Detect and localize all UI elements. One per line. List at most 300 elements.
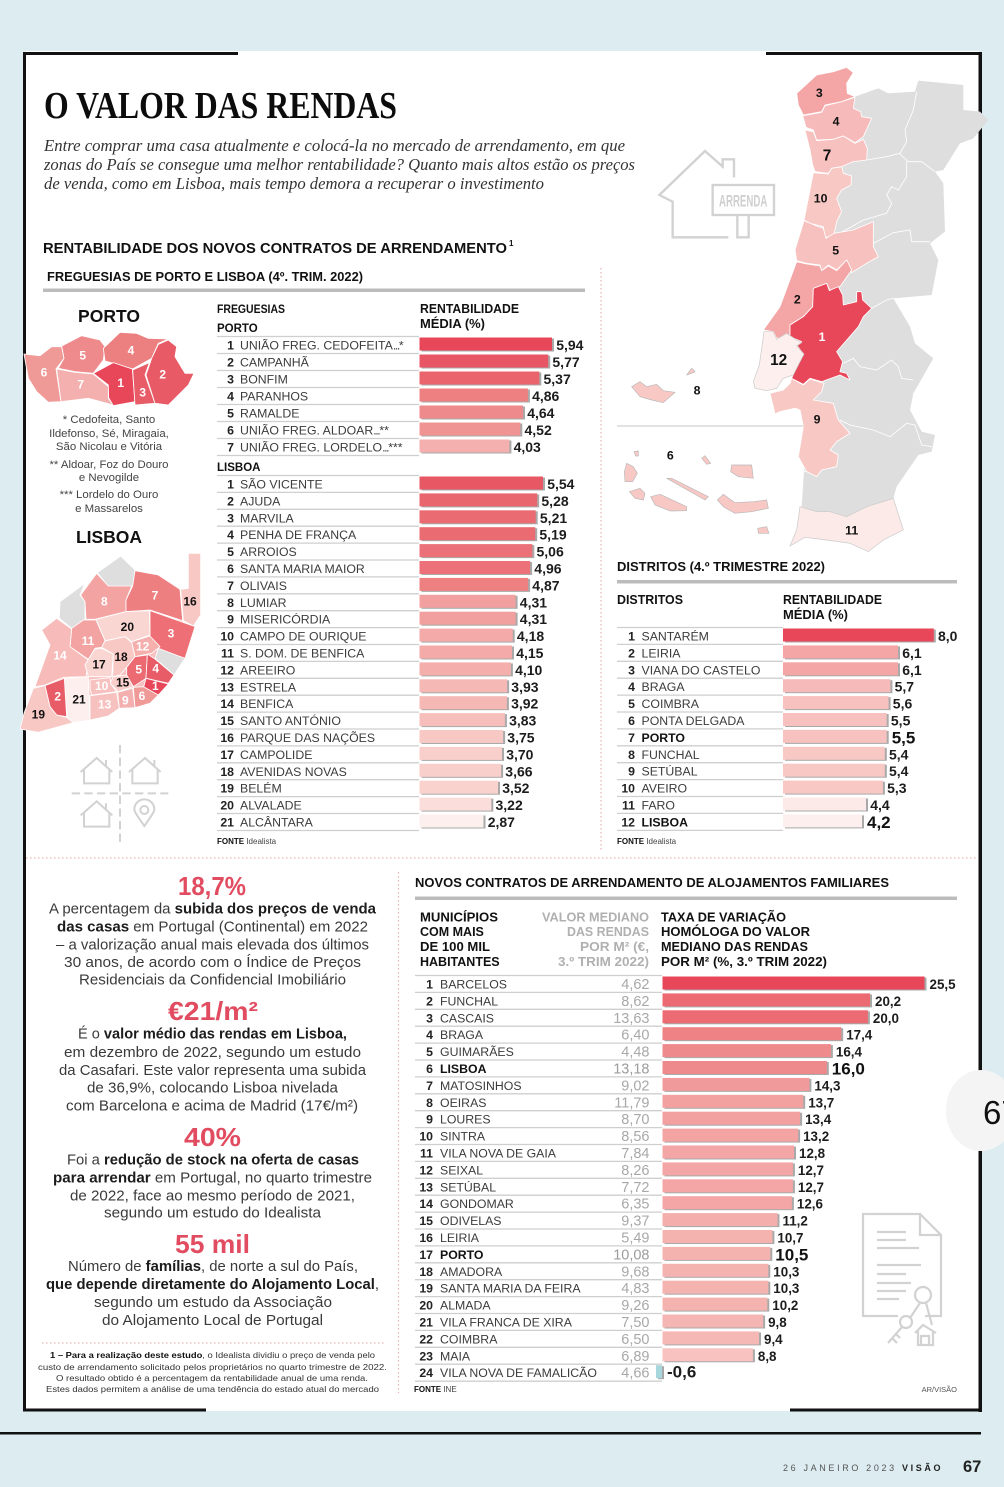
- table: freguesias header: RENTABILIDADE: [420, 302, 519, 316]
- column: municípios: COM MAIS: [420, 925, 484, 939]
- row: Penha de França: 5,19: [539, 527, 567, 543]
- row: Alvalade: ALVALADE: [240, 799, 302, 813]
- map: Porto freguesias: 6: [41, 366, 48, 380]
- row: Olivais: [217, 577, 560, 593]
- row: Leiria: 2: [628, 646, 635, 660]
- stat: €21/m²: em dezembro de 2022, segundo um estudo: [64, 1044, 361, 1061]
- row: Estrela: 13: [220, 680, 234, 694]
- row: Funchal: FUNCHAL: [440, 994, 498, 1008]
- sub-heading: freguesias: FREGUESIAS DE PORTO E LISBOA (4º. TRIM. 2022): [47, 269, 363, 284]
- Porto heading: PORTO: [78, 306, 140, 326]
- row: Estrela: [217, 678, 539, 695]
- stat: €21/m²: É o valor médio das rendas em Lisboa,: [78, 1026, 347, 1042]
- row: Sintra: [415, 1128, 829, 1145]
- stat: €21/m²: com Barcelona e acima de Madrid (17€/m²): [66, 1098, 358, 1114]
- row: Seixal: 12: [419, 1163, 433, 1177]
- map: district numbers: 8: [694, 384, 701, 398]
- row: Viana do Castelo: VIANA DO CASTELO: [642, 663, 760, 677]
- row: São Vicente: 1: [227, 478, 234, 492]
- Porto footnotes: e Nevogilde: [79, 472, 139, 484]
- column: taxa de variação: HOMÓLOGA DO VALOR: [661, 924, 810, 939]
- row: Odivelas: 11,2: [782, 1214, 808, 1229]
- stat: €21/m²: [59, 996, 367, 1114]
- row: Santarém: SANTARÉM: [642, 628, 709, 644]
- row: Belém: BELÉM: [240, 781, 282, 796]
- source: distritos: FONTE Idealista: [617, 837, 677, 846]
- row: Cascais: 13,63: [613, 1011, 650, 1027]
- row: Maia: 6,89: [621, 1349, 650, 1365]
- stat: 18,7%: 18,7%: [178, 871, 246, 901]
- footnote marker: 1: [509, 239, 514, 248]
- row: Leiria: 16: [419, 1231, 433, 1245]
- map: Porto freguesias: 5: [79, 348, 86, 362]
- footer: date and magazine: 26 JANEIRO 2023 VISÃO: [783, 1463, 943, 1473]
- map: district numbers: 5: [832, 243, 839, 257]
- row: Vila Franca de Xira: 9,8: [768, 1315, 787, 1330]
- row: Lordelo: UNIÃO FREG. LORDELO...***: [240, 440, 403, 454]
- map: district numbers: 9: [814, 413, 821, 427]
- row: Guimarães: 4,48: [621, 1045, 650, 1061]
- row: Odivelas: ODIVELAS: [440, 1214, 502, 1228]
- row: Marvila: 3: [227, 511, 234, 525]
- row: Alvalade: [217, 797, 523, 813]
- row: Santo António: 15: [220, 714, 234, 728]
- row: Loures: [415, 1111, 832, 1128]
- row: Funchal: 8,62: [621, 994, 650, 1010]
- row: Benfica: BENFICA: [240, 697, 294, 711]
- row: Parque das Nações: 16: [220, 731, 234, 745]
- column: municípios: [420, 910, 500, 969]
- row: Paranhos: [217, 388, 560, 404]
- row: Avenidas Novas: [217, 763, 533, 779]
- row: Campo de Ourique: 10: [220, 630, 234, 644]
- map: Lisboa freguesias: 7: [152, 588, 159, 602]
- row: Santo António: 3,83: [509, 713, 537, 729]
- row: Campolide: 3,70: [506, 746, 534, 762]
- map: Lisboa freguesias: 2: [54, 689, 61, 703]
- row: Lisboa: 12: [621, 815, 635, 829]
- row: Santa Maria da Feira: SANTA MARIA DA FEIRA: [440, 1282, 581, 1296]
- row: Lisboa: [415, 1060, 865, 1078]
- heading: novos contratos: NOVOS CONTRATOS DE ARRENDAMENTO DE ALOJAMENTOS FAMILIARES: [415, 875, 889, 890]
- row: Gondomar: [415, 1195, 823, 1213]
- map: Lisboa freguesias: 5: [135, 662, 142, 676]
- table: distritos: [617, 628, 958, 832]
- row: Ramalde: [217, 404, 555, 421]
- Lisboa label: LISBOA: [217, 462, 260, 474]
- row: Santa Maria Maior: SANTA MARIA MAIOR: [240, 562, 365, 576]
- row: Santo António: [217, 712, 537, 729]
- row: Olivais: OLIVAIS: [240, 579, 287, 593]
- row: Leiria: 6,1: [902, 645, 922, 661]
- row: São Vicente: SÃO VICENTE: [240, 478, 323, 492]
- stat: 18,7%: – a valorização anual mais elevada dos últimos: [56, 936, 369, 954]
- footer: page number: 67: [963, 1458, 981, 1476]
- row: Setúbal: SETÚBAL: [440, 1179, 496, 1194]
- row: São Vicente: [217, 476, 575, 492]
- column: municípios: MUNICÍPIOS: [420, 910, 498, 924]
- row: Leiria: [617, 644, 922, 661]
- row: Guimarães: GUIMARÃES: [440, 1045, 514, 1059]
- intro text: zonas do País se consegue uma melhor rentabilidade? Quanto mais altos estão os preços: [43, 155, 635, 174]
- row: Setúbal: 5,4: [889, 763, 909, 779]
- row: Ramalde: 5: [227, 406, 234, 420]
- row: Ponta Delgada: 6: [628, 714, 635, 728]
- stat: 55 mil: [46, 1229, 379, 1329]
- row: Alvalade: 20: [220, 799, 234, 813]
- table: freguesias header: [217, 302, 519, 331]
- row: Coimbra: [617, 695, 912, 712]
- row: Setúbal: 7,72: [621, 1180, 650, 1196]
- table: distritos header: RENTABILIDADE: [783, 593, 882, 607]
- row: Lisboa: 6: [426, 1062, 433, 1076]
- row: Arroios: 5,06: [536, 544, 564, 560]
- source: freguesias: FONTE Idealista: [217, 837, 277, 846]
- row: Matosinhos: 14,3: [814, 1078, 840, 1093]
- map: Lisboa freguesias: 14: [53, 648, 67, 662]
- map: Braga: [803, 97, 872, 143]
- row: Vila Nova de Famalicão: -0,6: [667, 1363, 696, 1382]
- footnote: O resultado obtido é a percentagem da rentabilidade anual de uma renda.: [56, 1373, 368, 1383]
- intro text: [43, 136, 635, 193]
- column: taxa de variação: [661, 910, 827, 969]
- row: Ajuda: AJUDA: [240, 494, 281, 508]
- row: Gondomar: GONDOMAR: [440, 1197, 514, 1211]
- row: Bonfim: 3: [227, 372, 234, 386]
- row: Almada: 10,2: [772, 1298, 798, 1313]
- stat: 40%: [53, 1122, 372, 1222]
- map: district numbers: 1: [819, 330, 826, 344]
- row: Campanhã: CAMPANHÃ: [240, 356, 310, 370]
- row: Arroios: ARROIOS: [240, 545, 297, 559]
- row: Porto: 5,5: [892, 728, 915, 747]
- map: Porto freguesias: 2: [159, 367, 166, 381]
- row: Penha de França: [217, 526, 567, 543]
- row: Amadora: 18: [419, 1265, 433, 1279]
- row: Ajuda: [217, 492, 569, 509]
- row: Aldoar: 4,52: [524, 422, 552, 438]
- row: Vila Nova de Gaia: 7,84: [621, 1146, 650, 1162]
- row: Santa Maria Maior: 4,96: [534, 560, 562, 576]
- row: Braga: BRAGA: [642, 680, 685, 694]
- row: Seixal: SEIXAL: [440, 1163, 483, 1177]
- icon: contract document with keys: [863, 1214, 941, 1345]
- table: freguesias header: FREGUESIAS: [217, 302, 285, 316]
- row: Vila Nova de Gaia: VILA NOVA DE GAIA: [440, 1146, 557, 1160]
- stat: 55 mil: do Alojamento Local de Portugal: [102, 1312, 323, 1329]
- Lisboa heading: LISBOA: [76, 527, 142, 547]
- row: Gondomar: 6,35: [621, 1197, 650, 1213]
- stat: 40%: segundo um estudo do Idealista: [104, 1204, 322, 1222]
- row: Oeiras: 11,79: [614, 1095, 650, 1111]
- row: Setúbal: 9: [628, 765, 635, 779]
- row: Leiria: LEIRIA: [440, 1231, 480, 1245]
- row: Lisboa: LISBOA: [440, 1062, 487, 1076]
- stat: 40%: 40%: [184, 1122, 241, 1152]
- stat: 40%: de 2022, face ao mesmo período de 2021,: [70, 1188, 355, 1204]
- stat: 55 mil: segundo um estudo da Associação: [94, 1294, 332, 1311]
- key figures column: [46, 871, 379, 1329]
- row: Setúbal: 13: [419, 1180, 433, 1194]
- row: Ajuda: 2: [227, 494, 234, 508]
- row: Cedofeita: UNIÃO FREG. CEDOFEITA...*: [240, 338, 404, 352]
- row: Matosinhos: [415, 1077, 840, 1094]
- stat: 55 mil: Número de famílias, de norte a sul do País,: [68, 1258, 358, 1275]
- column: municípios: DE 100 MIL: [420, 940, 490, 954]
- row: Amadora: [415, 1263, 799, 1280]
- row: Leiria: 5,49: [621, 1230, 650, 1246]
- Porto footnotes: * Cedofeita, Santo: [63, 414, 155, 426]
- row: Cedofeita: 5,94: [556, 337, 584, 353]
- row: Penha de França: 4: [227, 528, 234, 542]
- row: Amadora: 10,3: [773, 1264, 799, 1279]
- title: O VALOR DAS RENDAS: [44, 85, 397, 127]
- row: Sintra: 13,2: [803, 1129, 829, 1144]
- map: Madeira islands: [632, 368, 695, 403]
- row: S. Dom. de Benfica: [217, 644, 544, 661]
- row: Coimbra: 5: [628, 697, 635, 711]
- row: Arroios: 5: [227, 545, 234, 559]
- row: Barcelos: BARCELOS: [440, 978, 507, 992]
- row: Alcântara: 2,87: [488, 814, 515, 830]
- row: Setúbal: [415, 1178, 824, 1196]
- row: Oeiras: 8: [426, 1096, 433, 1110]
- row: Coimbra: 6,50: [621, 1332, 650, 1348]
- row: Barcelos: 25,5: [930, 977, 956, 992]
- map: Setúbal: [770, 378, 850, 477]
- row: Coimbra: 22: [419, 1332, 433, 1346]
- row: Braga: 5,7: [895, 679, 914, 695]
- row: Faro: 11: [622, 798, 635, 812]
- row: Bonfim: [217, 370, 571, 387]
- row: Campo de Ourique: 4,18: [517, 628, 544, 644]
- row: Parque das Nações: PARQUE DAS NAÇÕES: [240, 730, 375, 745]
- Porto footnotes: São Nicolau e Vitória: [56, 441, 163, 453]
- row: Vila Franca de Xira: 7,50: [621, 1315, 650, 1331]
- row: Aveiro: AVEIRO: [642, 782, 687, 796]
- row: Paranhos: PARANHOS: [240, 390, 308, 404]
- table: Porto freguesias: [217, 323, 584, 456]
- row: Olivais: 4,87: [532, 577, 560, 593]
- row: Areeiro: 4,10: [515, 662, 543, 678]
- row: Vila Nova de Famalicão: [415, 1363, 696, 1382]
- row: Bonfim: BONFIM: [240, 372, 288, 386]
- row: Benfica: [217, 695, 539, 712]
- row: Vila Nova de Gaia: [415, 1144, 826, 1162]
- row: Barcelos: 1: [426, 978, 433, 992]
- stat: 40%: para arrendar em Portugal, no quarto trimestre: [53, 1170, 372, 1186]
- stat: €21/m²: €21/m²: [168, 996, 258, 1026]
- map: Lisboa freguesias: 10: [95, 679, 109, 693]
- row: Porto: 17: [419, 1248, 433, 1262]
- column: valor mediano: [542, 910, 649, 969]
- map: Lisboa freguesias: 9: [122, 693, 129, 707]
- Porto footnotes: Ildefonso, Sé, Miragaia,: [49, 428, 169, 440]
- row: Marvila: [217, 509, 567, 526]
- row: Aveiro: 5,3: [887, 780, 907, 796]
- map: Lisboa freguesias: 8: [101, 594, 108, 608]
- row: São Vicente: 5,54: [547, 476, 575, 492]
- row: Lumiar: 8: [227, 596, 234, 610]
- row: Vila Nova de Gaia: 11: [420, 1146, 433, 1160]
- stat: 55 mil: 55 mil: [175, 1229, 250, 1259]
- row: Aldoar: 6: [227, 424, 234, 438]
- stat: 18,7%: [49, 871, 377, 988]
- row: Vila Franca de Xira: 21: [419, 1316, 433, 1330]
- row: Viana do Castelo: [617, 661, 922, 678]
- row: Avenidas Novas: 18: [220, 765, 234, 779]
- row: Porto: 7: [628, 731, 635, 745]
- row: Parque das Nações: 3,75: [507, 730, 535, 746]
- row: Faro: [617, 796, 890, 813]
- row: Funchal: 8: [628, 748, 635, 762]
- map: Lisboa freguesias: 13: [98, 697, 112, 711]
- row: Campo de Ourique: CAMPO DE OURIQUE: [240, 630, 366, 644]
- row: Almada: 20: [419, 1299, 433, 1313]
- row: Matosinhos: 9,02: [621, 1078, 650, 1094]
- row: Campolide: 17: [220, 748, 234, 762]
- row: Funchal: FUNCHAL: [642, 748, 700, 762]
- dotted separators: [26, 268, 976, 1393]
- row: Setúbal: SETÚBAL: [642, 764, 698, 779]
- row: Santa Maria da Feira: 19: [419, 1282, 433, 1296]
- map: Viana do Castelo: [797, 67, 855, 115]
- row: Cedofeita: [217, 336, 584, 353]
- table: distritos header: [617, 593, 882, 622]
- row: Maia: [415, 1347, 777, 1365]
- row: Matosinhos: MATOSINHOS: [440, 1079, 522, 1093]
- row: Benfica: 14: [220, 697, 234, 711]
- row: Campolide: CAMPOLIDE: [240, 748, 312, 762]
- row: Santarém: [617, 628, 958, 644]
- row: Sintra: SINTRA: [440, 1130, 486, 1144]
- row: Braga: [617, 678, 914, 695]
- row: Braga: 4: [426, 1028, 433, 1042]
- map: Lisboa freguesias: 6: [139, 689, 146, 703]
- row: Coimbra: COIMBRA: [642, 697, 700, 711]
- row: Santo António: SANTO ANTÓNIO: [240, 713, 341, 728]
- stat: 40%: Foi a redução de stock na oferta de casas: [67, 1152, 359, 1168]
- row: Santarém: 8,0: [938, 628, 958, 644]
- row: Funchal: 20,2: [875, 994, 901, 1009]
- row: Funchal: [415, 992, 901, 1010]
- row: Alvalade: 3,22: [495, 797, 523, 813]
- stat: 18,7%: 30 anos, de acordo com o Índice de Preços: [64, 954, 361, 971]
- row: Estrela: 3,93: [511, 679, 539, 695]
- table: Lisboa freguesias: [217, 462, 575, 830]
- row: Cascais: 3: [426, 1011, 433, 1025]
- page-tab circle: [946, 1070, 1004, 1151]
- map: Lisboa freguesias: 21: [72, 693, 86, 707]
- intro text: de venda, como em Lisboa, mais tempo demora a recuperar o investimento: [44, 174, 544, 193]
- map: Lisboa freguesias: [20, 527, 201, 732]
- row: Cedofeita: 1: [227, 338, 234, 352]
- row: Santa Maria Maior: [217, 560, 562, 576]
- map: district numbers: [667, 86, 858, 538]
- row: Loures: 9: [426, 1113, 433, 1127]
- row: Misericórdia: [217, 611, 547, 627]
- row: Alcântara: ALCÂNTARA: [240, 814, 314, 830]
- table: distritos header: MÉDIA (%): [783, 607, 848, 622]
- row: S. Dom. de Benfica: 4,15: [516, 645, 544, 661]
- map: district numbers: 6: [667, 449, 674, 463]
- Porto footnotes: [49, 414, 169, 515]
- row: Lisboa: 16,0: [832, 1060, 865, 1078]
- row: Santa Maria Maior: 6: [227, 562, 234, 576]
- icon: houses and location pin: [72, 745, 168, 843]
- row: Areeiro: [217, 661, 543, 678]
- row: Santa Maria da Feira: 10,3: [773, 1281, 799, 1296]
- map: Azores islands: [624, 451, 769, 533]
- icon: house with ARRENDA sign: ARRENDA: [719, 192, 767, 211]
- row: Seixal: [415, 1161, 824, 1179]
- row: Marvila: 5,21: [540, 510, 567, 526]
- row: Estrela: ESTRELA: [240, 680, 297, 694]
- row: Aveiro: [617, 780, 907, 796]
- row: Cascais: 20,0: [873, 1011, 899, 1026]
- map: district numbers: 10: [814, 192, 828, 206]
- row: Loures: 13,4: [805, 1112, 832, 1127]
- row: Ajuda: 5,28: [541, 493, 569, 509]
- row: Leiria: 10,7: [777, 1230, 803, 1246]
- row: Olivais: 7: [227, 579, 234, 593]
- table: municípios: [415, 976, 956, 1382]
- row: Barcelos: [415, 976, 956, 993]
- row: Porto: PORTO: [642, 731, 685, 745]
- row: Cascais: CASCAIS: [440, 1011, 494, 1025]
- row: Aldoar: [217, 422, 552, 438]
- map: Lisboa freguesias: 20: [121, 620, 134, 634]
- column: taxa de variação: MEDIANO DAS RENDAS: [661, 940, 808, 954]
- footnote: [38, 1350, 387, 1394]
- map: Lisboa freguesias: 12: [136, 639, 150, 653]
- map: district numbers: 4: [833, 115, 840, 129]
- row: Braga: 6,40: [621, 1028, 650, 1044]
- column: valor mediano: VALOR MEDIANO: [542, 910, 649, 924]
- row: Bonfim: 5,37: [543, 371, 571, 387]
- footnote: Estes dados permitem a análise de uma tendência do estado atual do mercado: [46, 1384, 379, 1394]
- row: Arroios: [217, 543, 564, 560]
- row: Odivelas: 9,37: [621, 1214, 650, 1230]
- map: Faro: [790, 498, 903, 552]
- intro text: Entre comprar uma casa atualmente e colocá-la no mercado de arrendamento, em que: [43, 136, 625, 155]
- row: Ponta Delgada: 5,5: [891, 712, 911, 728]
- row: Porto: [617, 728, 915, 747]
- row: Lisboa: LISBOA: [642, 815, 688, 829]
- row: Avenidas Novas: 3,66: [505, 763, 533, 779]
- row: Lumiar: [217, 594, 547, 610]
- table: freguesias header: MÉDIA (%): [420, 316, 485, 331]
- map: Aveiro: [804, 167, 852, 238]
- row: Areeiro: 12: [220, 663, 234, 677]
- map: Porto district: [805, 130, 867, 173]
- table: distritos header: DISTRITOS: [617, 593, 683, 607]
- footnote: 1 – Para a realização deste estudo , o Idealista dividiu o preço de venda pelo: [50, 1350, 375, 1360]
- map: district numbers: 12: [770, 352, 787, 369]
- stat: €21/m²: da Casafari. Este valor representa uma subida: [59, 1062, 367, 1079]
- row: Vila Nova de Famalicão: 24: [419, 1366, 433, 1380]
- map: Portugal districts: [617, 67, 988, 552]
- row: Almada: [415, 1297, 798, 1314]
- map: district numbers: 7: [823, 148, 831, 165]
- row: Odivelas: [415, 1212, 808, 1230]
- map: Santarém: [790, 283, 872, 384]
- map: Lisboa freguesias: 16: [183, 595, 197, 609]
- row: Braga: 17,4: [846, 1028, 873, 1043]
- row: Campanhã: 2: [227, 356, 234, 370]
- row: Faro: FARO: [642, 798, 675, 812]
- row: Misericórdia: 4,31: [520, 611, 547, 627]
